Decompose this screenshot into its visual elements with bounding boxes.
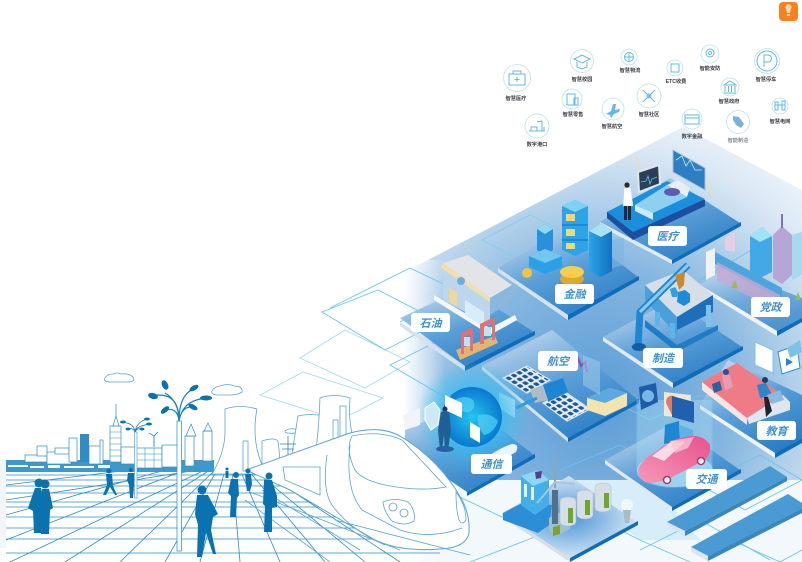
icon: 智慧电网 [770, 98, 790, 125]
street lamp small [120, 418, 152, 498]
person: platform far [245, 468, 252, 491]
icon: 智慧医疗 [504, 64, 530, 102]
tile: transport [605, 423, 741, 511]
label: 党政 [751, 297, 790, 317]
icon: 智能制造: 智能制造 [728, 136, 749, 144]
label: 通信 [471, 454, 512, 474]
label: 教育 [757, 421, 796, 440]
circuit line network [260, 215, 802, 562]
icon: 智慧航空 [602, 98, 624, 130]
icon: 智慧电网: 智慧电网 [770, 117, 790, 125]
icon: 智能安防: 智能安防 [700, 64, 720, 72]
icon: 数字金融: 数字金融 [682, 132, 703, 140]
person: large walking [195, 486, 218, 557]
clouds [105, 373, 298, 433]
tile: government [700, 268, 802, 336]
icon cluster: smart applications [504, 45, 790, 148]
scene: government buildings [706, 214, 802, 312]
floor grid [0, 460, 440, 562]
icon: 智慧零售: 智慧零售 [563, 110, 583, 118]
label: 航空 [538, 351, 578, 371]
street lamp large [147, 379, 212, 551]
icon: ETC收费: ETC收费 [666, 77, 687, 85]
icon: 智慧物流 [620, 49, 641, 74]
scene: medical ward [607, 150, 713, 240]
scene: transport car hologram [637, 383, 713, 487]
tile: energy [502, 476, 638, 562]
scene: gas station [434, 255, 517, 360]
tile: education [700, 360, 802, 458]
label: 医疗 [648, 226, 687, 246]
tile: oil [400, 288, 535, 371]
icon: 数字港口: 数字港口 [527, 140, 547, 148]
isometric ground base [400, 127, 802, 562]
blue road bar 2 [691, 494, 802, 561]
icon: 智慧政府: 智慧政府 [719, 97, 739, 105]
person: distant [226, 468, 228, 478]
orange tip button [779, 2, 798, 21]
label: 制造 [643, 348, 683, 368]
icon: 智慧校园 [570, 50, 594, 83]
icon: ETC收费 [666, 60, 687, 85]
blue road bar 1 [667, 466, 787, 536]
scene: finance servers [522, 200, 624, 285]
person: platform one [228, 472, 239, 517]
power plant cooling towers [212, 396, 353, 474]
icon: 智慧社区 [637, 84, 661, 118]
scene: education book [702, 340, 802, 425]
icon: 智慧物流: 智慧物流 [620, 66, 641, 74]
label: 交通: 交通 [696, 473, 719, 486]
bullet train [245, 430, 470, 562]
icon: 智慧停车: 智慧停车 [756, 75, 776, 83]
scene: aviation solar panels [499, 355, 627, 421]
skyline [6, 404, 214, 472]
icon: 智慧停车 [754, 48, 780, 83]
icon: 数字金融 [682, 109, 703, 140]
icon: 智慧零售 [562, 89, 583, 118]
icon: 数字港口 [525, 114, 549, 148]
icon: 智慧航空: 智慧航空 [602, 122, 622, 130]
label: 党政: 党政 [760, 301, 783, 314]
tile: finance [498, 225, 639, 320]
label: 通信: 通信 [480, 458, 504, 471]
label: 金融: 金融 [564, 288, 587, 301]
person: couple [28, 478, 53, 534]
label: 航空: 航空 [547, 355, 571, 368]
people silhouettes [28, 468, 277, 557]
icon: 智慧校园: 智慧校园 [572, 75, 592, 83]
label: 教育: 教育 [766, 425, 789, 438]
icon: 智慧政府 [719, 78, 739, 105]
tile: manufacturing [603, 300, 743, 388]
scene: communications globe [403, 361, 528, 473]
icon: 智慧医疗: 智慧医疗 [506, 94, 526, 102]
scene: energy [503, 458, 633, 536]
label: 石油: 石油 [420, 317, 443, 330]
label: 金融 [555, 284, 594, 304]
tile: communications [405, 403, 535, 496]
person: standing near lamp [127, 468, 134, 498]
tile: medical [600, 178, 741, 264]
icon: 智能安防 [700, 45, 720, 72]
label: 制造: 制造 [652, 352, 676, 365]
tile: aviation [482, 330, 639, 442]
label: 交通 [686, 469, 727, 489]
icon: 智能制造 [726, 110, 750, 144]
person: platform near train [263, 472, 277, 532]
person: walker [103, 468, 117, 495]
icon: 智慧社区: 智慧社区 [639, 110, 659, 118]
scene: manufacturing robot [632, 265, 718, 352]
label: 医疗: 医疗 [656, 230, 680, 243]
label: 石油 [411, 313, 450, 332]
